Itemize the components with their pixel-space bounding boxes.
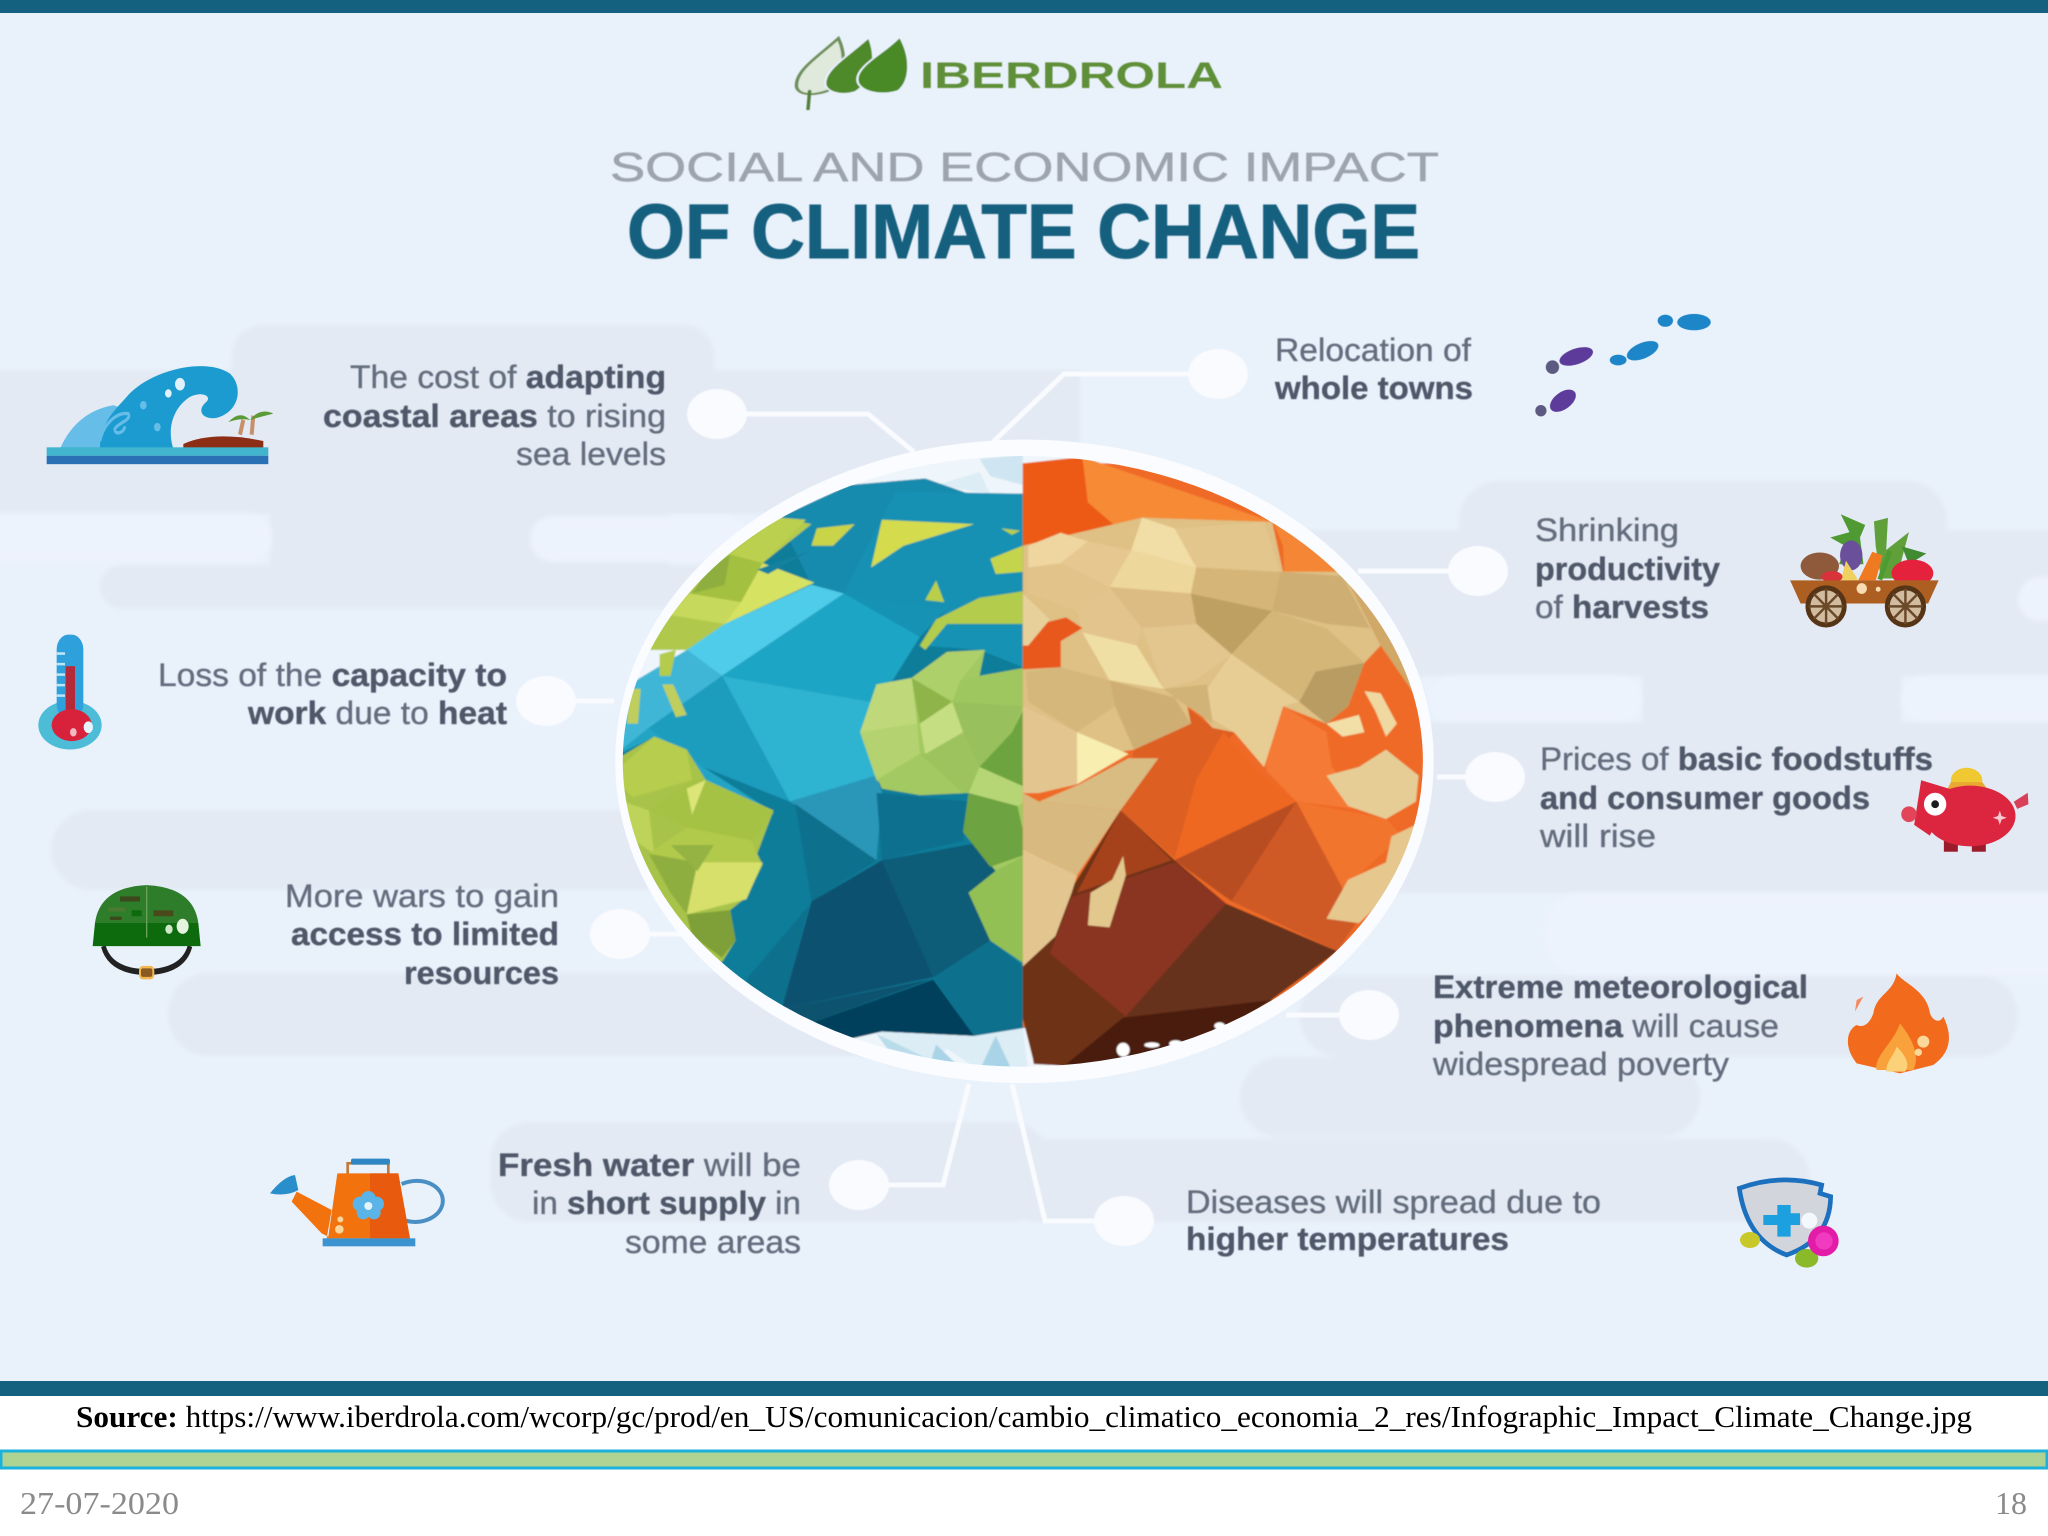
north america xyxy=(627,507,974,724)
text: harvests: Shrinking xyxy=(1535,512,1679,548)
text: extreme phenomena: widespread poverty xyxy=(1432,1046,1729,1082)
text: relocation: whole towns xyxy=(1274,370,1473,406)
icon: flame xyxy=(1848,973,1949,1073)
title xyxy=(610,144,1439,275)
text: harvests xyxy=(1535,512,1720,625)
source line: Source: https://www.iberdrola.com/wcorp/gc/prod/en_US/comunicacion/cambio_climatico_economia_2_res/Infographic_Impact_Climate_Change.jpg xyxy=(76,1399,1972,1434)
title: OF CLIMATE CHANGE xyxy=(627,189,1420,275)
green footer band xyxy=(1,1451,2047,1468)
text: wars: More wars to gain xyxy=(285,878,559,914)
text: harvests: of harvests xyxy=(1535,589,1709,625)
text: fresh water: in short supply in xyxy=(532,1185,801,1221)
text: extreme phenomena: Extreme meteorological xyxy=(1433,969,1808,1005)
icon: footprints xyxy=(1535,314,1711,416)
logo: Iberdrola xyxy=(796,37,1223,110)
text: prices: Prices of basic foodstuffs xyxy=(1540,741,1933,777)
text: prices xyxy=(1539,741,1933,854)
europe xyxy=(920,528,1023,650)
icon: harvest cart xyxy=(1790,514,1939,625)
top bar xyxy=(0,0,2048,13)
text: relocation: Relocation of xyxy=(1275,332,1471,368)
text: diseases: Diseases will spread due to xyxy=(1186,1184,1601,1220)
text: wars xyxy=(285,878,559,991)
text: cost of adapting: coastal areas to rising xyxy=(323,398,666,434)
text: capacity to work: work due to heat xyxy=(247,695,507,731)
text: prices: and consumer goods xyxy=(1540,780,1870,816)
icon: wave xyxy=(47,366,273,464)
bottom bar xyxy=(0,1381,2048,1396)
text: wars: access to limited xyxy=(291,916,559,952)
footer background xyxy=(0,1396,2048,1536)
text: fresh water: Fresh water will be xyxy=(498,1147,801,1183)
text: prices: will rise xyxy=(1539,818,1656,854)
south america xyxy=(622,736,775,963)
ocean: west xyxy=(611,479,1028,1040)
text: cost of adapting xyxy=(323,359,666,472)
text: extreme phenomena xyxy=(1432,969,1808,1082)
text: fresh water: some areas xyxy=(625,1224,801,1260)
africa: green half xyxy=(860,650,1039,966)
icon: leaves xyxy=(796,37,908,110)
globe xyxy=(600,420,1446,1097)
text: harvests: productivity xyxy=(1535,551,1720,587)
icon: thermometer xyxy=(38,635,102,750)
text: wars: resources xyxy=(404,955,559,991)
text: cost of adapting: sea levels xyxy=(516,436,666,472)
text: diseases: higher temperatures xyxy=(1186,1221,1509,1257)
text: fresh water xyxy=(498,1147,801,1260)
date: 27-07-2020 xyxy=(20,1485,179,1521)
text: extreme phenomena: phenomena will cause xyxy=(1433,1008,1779,1044)
antarctic islets xyxy=(1117,1022,1225,1057)
text: diseases xyxy=(1186,1184,1601,1257)
ocean: east xyxy=(1023,457,1435,1068)
text: capacity to work: Loss of the capacity to xyxy=(158,657,507,693)
page number: 18 xyxy=(1995,1485,2027,1521)
icon: watering can xyxy=(270,1159,443,1246)
logo: Iberdrola: IBERDROLA xyxy=(920,55,1223,96)
icon: piggy bank xyxy=(1901,768,2028,852)
text: capacity to work xyxy=(158,657,507,731)
text: cost of adapting: The cost of adapting xyxy=(350,359,666,395)
text: relocation xyxy=(1274,332,1473,406)
eurasia and east africa: sand half xyxy=(1023,518,1419,966)
connector lines and dots xyxy=(516,349,1525,1246)
icon: helmet xyxy=(93,885,201,978)
polar ice xyxy=(876,455,1028,1071)
icon: health shield xyxy=(1739,1180,1839,1268)
title: SOCIAL AND ECONOMIC IMPACT xyxy=(610,144,1439,190)
